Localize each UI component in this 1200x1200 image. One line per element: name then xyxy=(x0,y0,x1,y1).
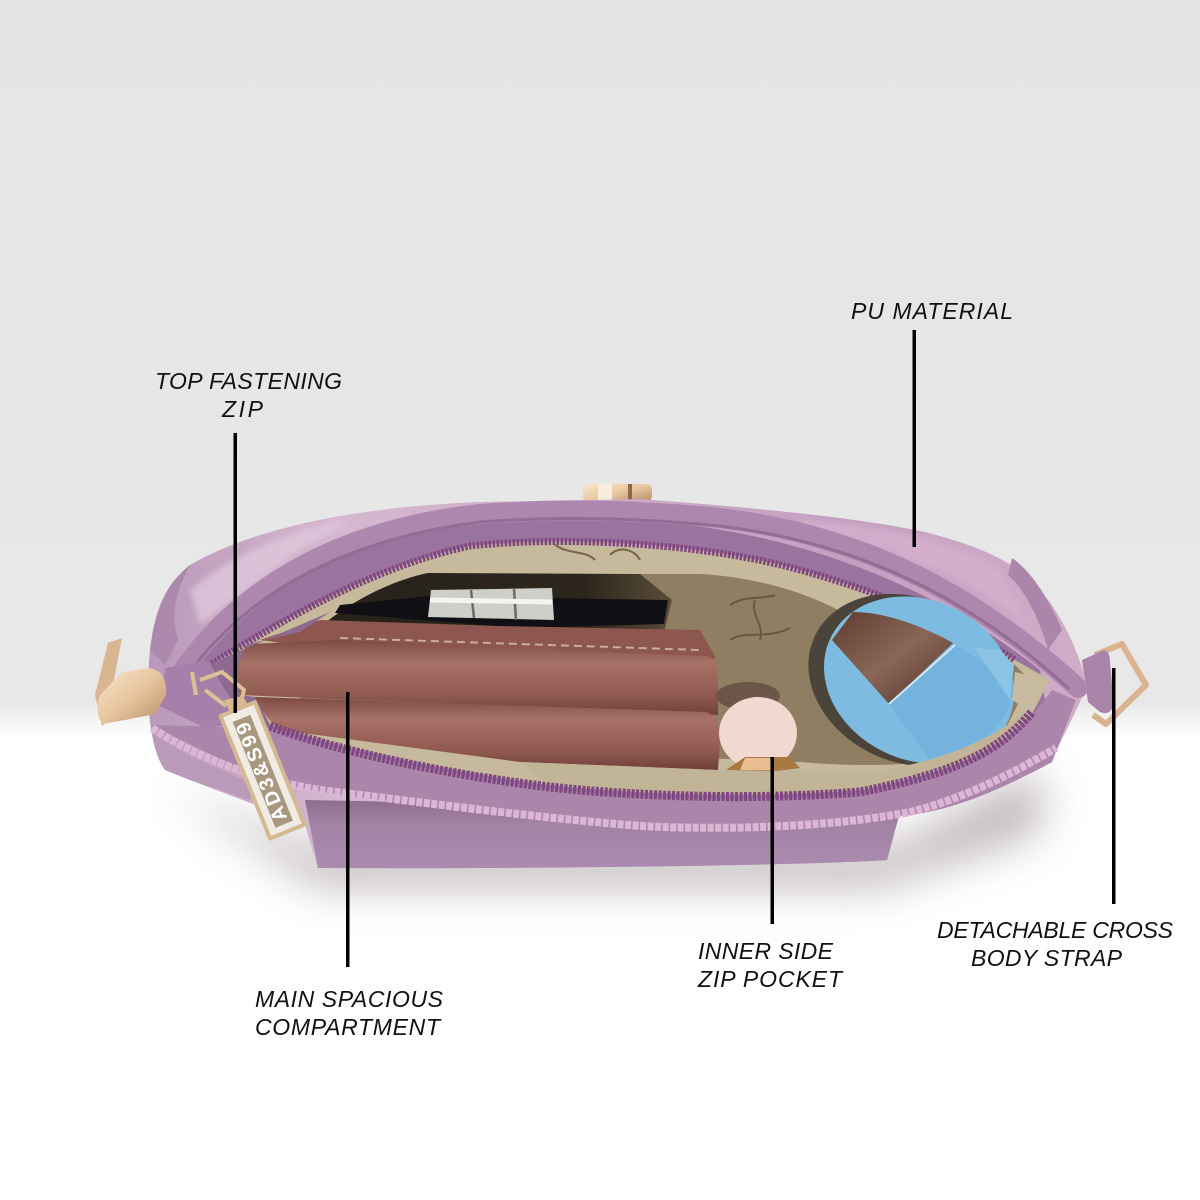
front lower panel xyxy=(305,800,900,868)
left textured lower xyxy=(165,745,255,800)
strap ring: right xyxy=(1082,644,1146,724)
lower lining strip xyxy=(520,712,1033,795)
wallet xyxy=(236,620,720,770)
brand tag: AD3&S99 xyxy=(232,719,292,824)
leader line: PU material xyxy=(912,330,916,547)
label: PU material: PU MATERIAL xyxy=(851,298,1013,324)
leader line: detachable strap xyxy=(1112,668,1116,904)
upper zip teeth xyxy=(205,541,1015,668)
label: main spacious compartment: MAIN SPACIOUS xyxy=(255,986,444,1012)
brown inner lining xyxy=(300,574,1030,765)
label: top fastening zip: TOP FASTENING xyxy=(155,368,342,394)
textured highlight right xyxy=(800,520,1030,630)
wallet upper roll xyxy=(236,640,718,715)
label: detachable cross body strap: BODY STRAP xyxy=(971,945,1123,971)
piping shade xyxy=(195,519,1068,688)
label: inner side zip pocket xyxy=(697,938,844,992)
lower front flap xyxy=(150,690,1076,827)
label: inner side zip pocket: INNER SIDE xyxy=(698,938,834,964)
label: main spacious compartment xyxy=(255,986,444,1040)
side lining right xyxy=(1012,672,1050,710)
wallet lower roll xyxy=(255,697,720,770)
label: detachable cross body strap: DETACHABLE CROSS xyxy=(937,917,1174,943)
label: top fastening zip xyxy=(155,368,342,422)
leader line: inner zip pocket xyxy=(770,757,774,924)
brand tag xyxy=(218,700,307,841)
label: detachable cross body strap xyxy=(937,917,1174,971)
top clasp xyxy=(583,484,652,502)
lining xyxy=(205,541,1050,795)
zip tape interior xyxy=(170,518,1045,800)
lower zip teeth xyxy=(270,712,1032,797)
zip puller xyxy=(97,668,252,724)
black case xyxy=(335,588,668,628)
zip end tab xyxy=(160,660,248,728)
dark shadow behind case xyxy=(320,573,672,632)
leader line: main compartment xyxy=(346,692,350,967)
left zip tape xyxy=(165,612,330,728)
upper piping xyxy=(182,511,1078,688)
side gusset left xyxy=(150,565,190,665)
side gusset right xyxy=(1008,558,1062,650)
lining motif xyxy=(555,545,790,785)
sparkle piping xyxy=(152,728,1056,828)
pink lipstick cap xyxy=(716,682,800,772)
label: inner side zip pocket: ZIP POCKET xyxy=(697,966,844,992)
illustration: open purple bag xyxy=(95,484,1146,868)
label: top fastening zip: ZIP xyxy=(221,396,264,422)
bag shadow xyxy=(170,770,1040,885)
wallet flap xyxy=(260,620,716,664)
label: main spacious compartment: COMPARTMENT xyxy=(255,1014,442,1040)
wallet stitch xyxy=(340,638,700,650)
strap ring: left xyxy=(95,638,122,726)
leader line: top fastening zip xyxy=(234,433,237,713)
textured highlight left xyxy=(190,520,350,625)
blue compact xyxy=(780,562,1042,798)
bag body xyxy=(148,499,1087,868)
